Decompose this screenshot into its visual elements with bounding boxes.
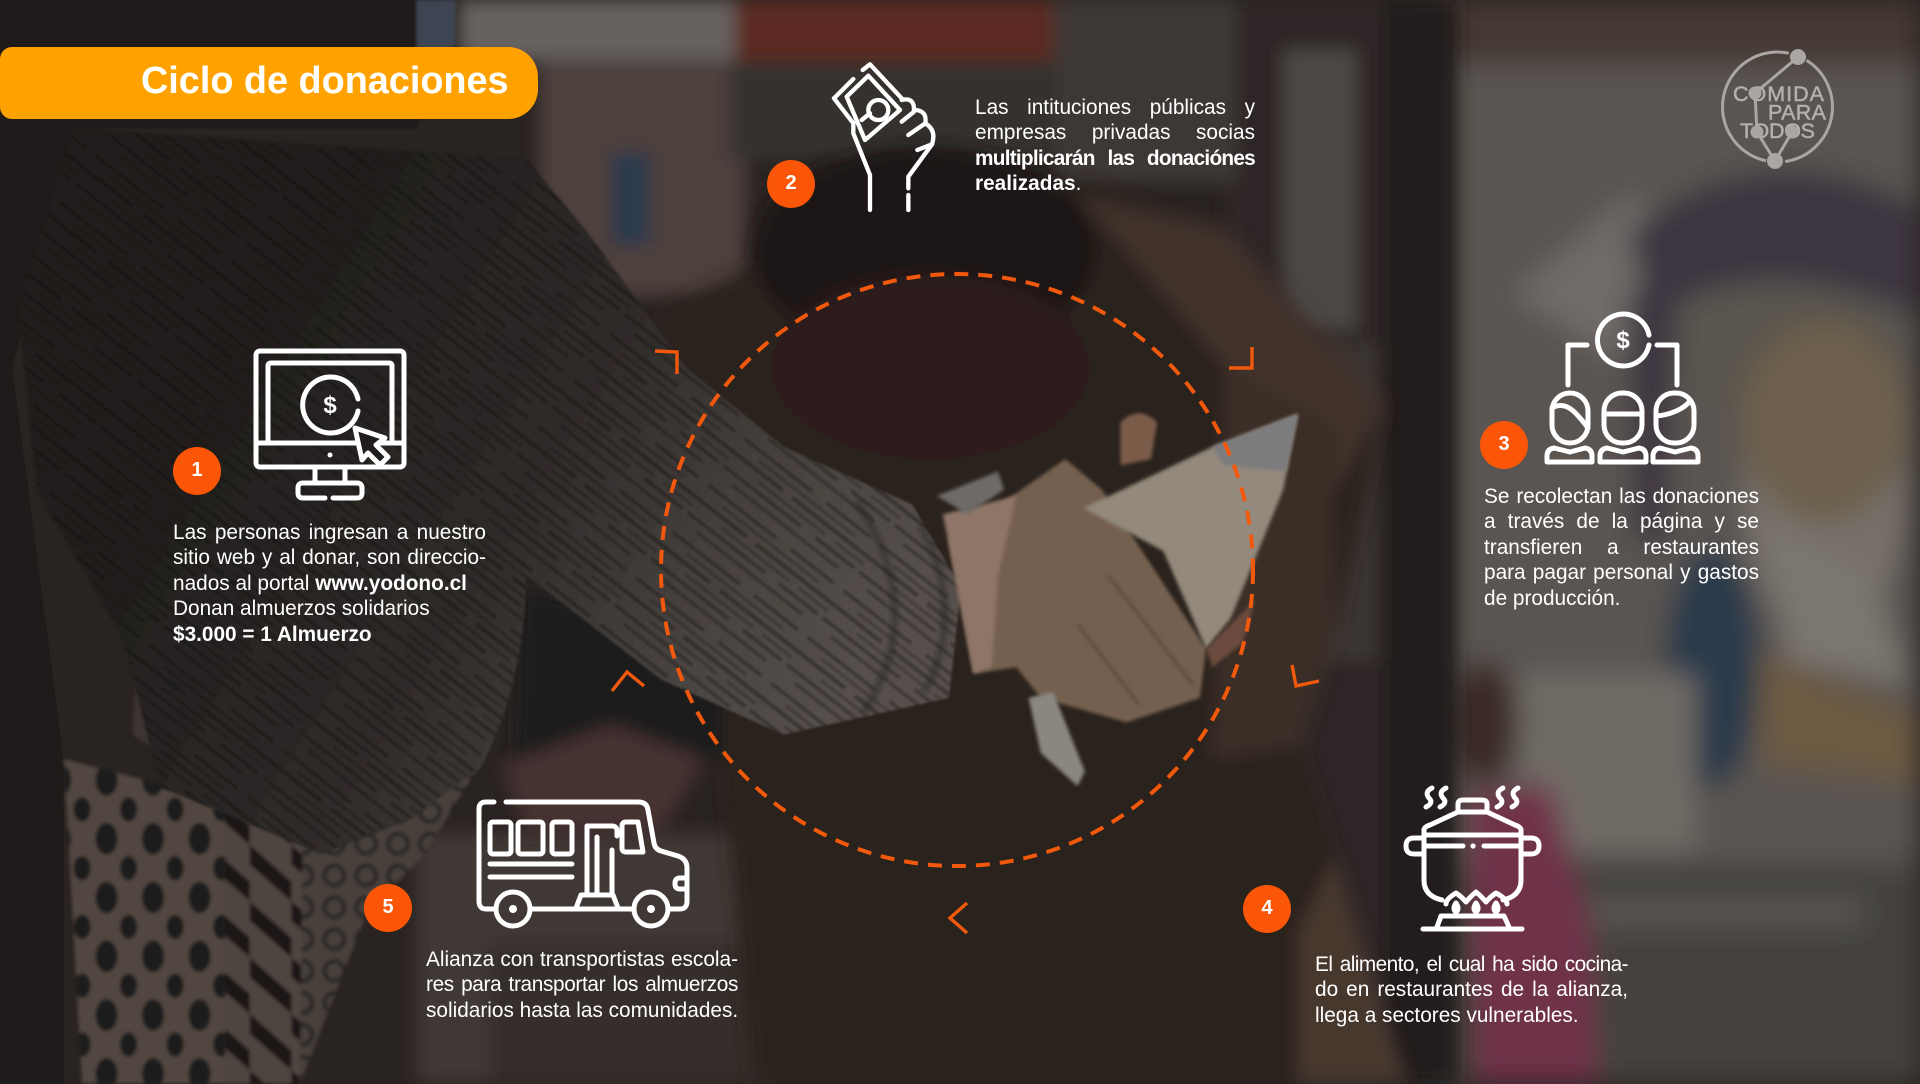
badge 3 bbox=[1480, 421, 1528, 469]
patterned dress bbox=[64, 759, 484, 1084]
badge 2: 2 bbox=[785, 172, 797, 194]
dashed circular cycle ring bbox=[659, 272, 1255, 868]
sweater body and arm sleeve bbox=[18, 129, 961, 853]
step 1 text: $3.000 = 1 Almuerzo bbox=[173, 623, 372, 646]
logo: Comida para Todos: COMIDA bbox=[1733, 82, 1825, 106]
icon: school bus bbox=[476, 800, 690, 928]
step 1 text: Donan almuerzos solidarios bbox=[173, 597, 430, 620]
step 4 text: llega a sectores vulnerables. bbox=[1315, 1004, 1579, 1027]
step 1 text: nados al portal www.yodono.cl bbox=[173, 572, 467, 595]
step 1 panel bbox=[173, 348, 486, 646]
dark figure left bbox=[0, 0, 459, 1084]
step 2 text: empresas privadas socias bbox=[975, 121, 1255, 144]
badge 3: 3 bbox=[1498, 433, 1510, 455]
logo: Comida para Todos: PARA bbox=[1768, 100, 1827, 124]
icon: monitor with dollar and cursor: $ bbox=[323, 392, 337, 419]
badge 4 bbox=[1243, 885, 1291, 933]
step 2 text: multiplicarán las donaciónes bbox=[975, 147, 1255, 170]
step 2 text bbox=[975, 96, 1255, 195]
step 2 text: Las intituciones públicas y bbox=[975, 96, 1255, 119]
icon: donations to three people bbox=[1544, 312, 1700, 464]
step 3 text: de producción. bbox=[1484, 587, 1620, 610]
badge 1 bbox=[173, 447, 221, 495]
cycle arrows bbox=[610, 347, 1320, 934]
step 4 text: do en restaurantes de la alianza, bbox=[1315, 978, 1628, 1001]
step 4 panel bbox=[1243, 786, 1628, 1027]
step 1 text bbox=[173, 521, 486, 646]
step 5 text: Alianza con transportistas escola- bbox=[426, 948, 738, 971]
logo: Comida para Todos bbox=[1721, 49, 1834, 169]
step 1 text: Las personas ingresan a nuestro bbox=[173, 521, 486, 544]
logo: Comida para Todos: TODOS bbox=[1740, 119, 1815, 143]
step 3 text: a través de la página y se bbox=[1484, 510, 1759, 533]
heading: Ciclo de donaciones bbox=[141, 60, 509, 102]
step 4 text bbox=[1315, 953, 1628, 1027]
icon: hand holding banknotes bbox=[832, 62, 936, 212]
icon: donations to three people: $ bbox=[1616, 327, 1630, 354]
step 5 text: solidarios hasta las comunidades. bbox=[426, 999, 738, 1022]
badge 1: 1 bbox=[191, 459, 203, 481]
step 3 text: transfieren a restaurantes bbox=[1484, 536, 1759, 559]
icon: monitor with dollar and cursor bbox=[254, 348, 406, 500]
badge 5: 5 bbox=[382, 896, 394, 918]
step 1 text: sitio web y al donar, son direccio- bbox=[173, 546, 486, 569]
step 3 text: para pagar personal y gastos bbox=[1484, 561, 1759, 584]
badge 5 bbox=[364, 884, 412, 932]
step 5 text bbox=[426, 948, 738, 1022]
title banner bbox=[0, 47, 538, 119]
step 3 panel bbox=[1480, 312, 1759, 610]
icon: steaming pot on burner bbox=[1404, 786, 1542, 932]
badge 4: 4 bbox=[1261, 897, 1273, 919]
badge 2 bbox=[767, 160, 815, 208]
step 3 text: Se recolectan las donaciones bbox=[1484, 485, 1759, 508]
step 5 panel bbox=[364, 800, 738, 1022]
step 4 text: El alimento, el cual ha sido cocina- bbox=[1315, 953, 1628, 976]
step 2 text: realizadas. bbox=[975, 172, 1081, 195]
step 3 text bbox=[1484, 485, 1759, 610]
step 2 panel bbox=[767, 62, 1255, 212]
step 5 text: res para transportar los almuerzos bbox=[426, 973, 738, 996]
